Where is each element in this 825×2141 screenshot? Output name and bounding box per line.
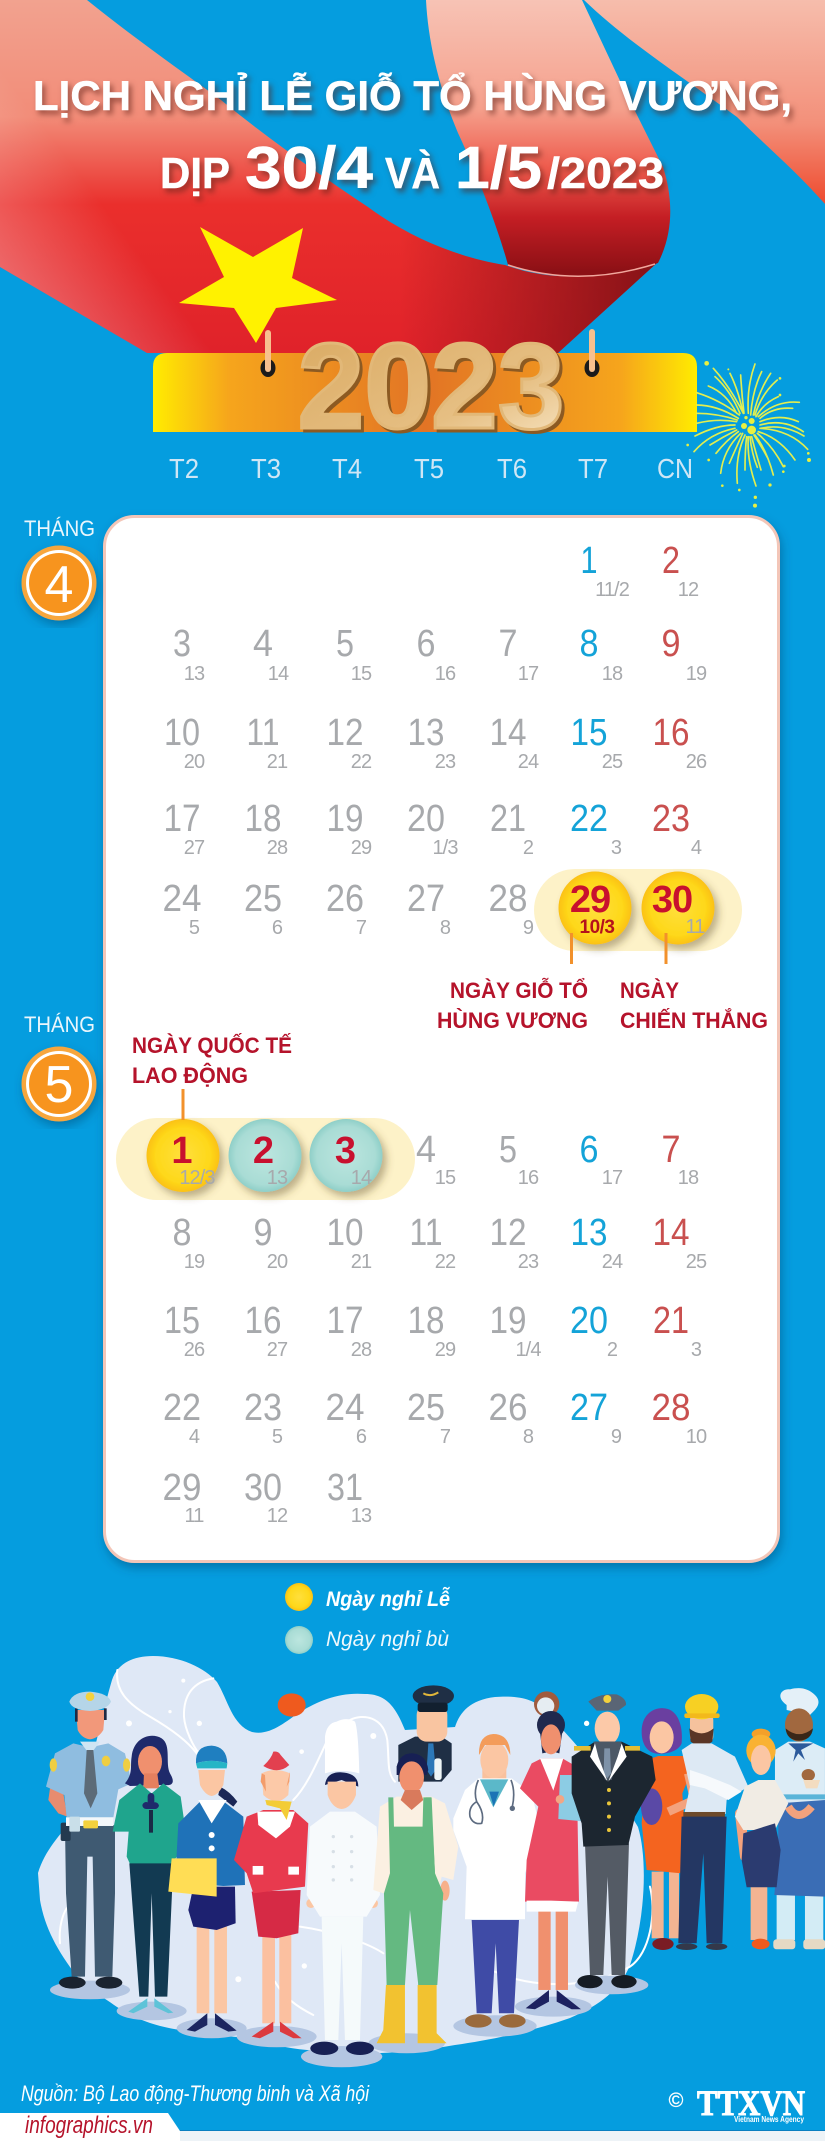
April calendar dates: 7 bbox=[356, 917, 367, 939]
April calendar dates: 11 bbox=[686, 916, 705, 938]
icon: yellow star bbox=[179, 227, 337, 343]
title bbox=[33, 70, 792, 201]
May calendar dates: 7 bbox=[662, 1129, 680, 1171]
May calendar dates: 10 bbox=[686, 1426, 707, 1448]
construction worker bbox=[676, 1694, 748, 1950]
April calendar dates: 3 bbox=[173, 623, 191, 665]
April calendar dates: 29 bbox=[570, 879, 610, 921]
title: VÀ bbox=[385, 148, 440, 198]
April calendar dates: 22 bbox=[351, 751, 372, 773]
May calendar dates: 8 bbox=[523, 1426, 534, 1448]
April calendar dates: 21 bbox=[267, 751, 288, 773]
May calendar dates: 9 bbox=[611, 1426, 622, 1448]
calendar header bar: 2023 bbox=[300, 321, 568, 457]
weekday labels: T7 bbox=[578, 453, 608, 484]
May calendar dates: 24 bbox=[602, 1251, 623, 1273]
legend bbox=[285, 1583, 450, 1654]
logo: TTXVN: TTXVN bbox=[697, 2083, 805, 2123]
weekday labels: T2 bbox=[169, 453, 199, 484]
May calendar dates: 28 bbox=[652, 1387, 690, 1429]
reporter bbox=[113, 1736, 185, 2013]
calendar header bar: 2023 bbox=[298, 318, 564, 454]
April calendar dates: 25 bbox=[602, 751, 623, 773]
chef right bbox=[773, 1688, 825, 1949]
April calendar dates: 11 bbox=[246, 712, 280, 754]
holiday label: Ngày Quốc tế Lao động bbox=[132, 1032, 292, 1088]
April calendar dates: 15 bbox=[351, 663, 372, 685]
May calendar dates: 16 bbox=[518, 1167, 539, 1189]
April calendar dates: 6 bbox=[416, 623, 436, 665]
April calendar dates: 27 bbox=[184, 837, 205, 859]
month label: April: 4 bbox=[45, 556, 73, 614]
May calendar dates: 24 bbox=[326, 1387, 364, 1429]
May calendar dates: 20 bbox=[570, 1300, 608, 1342]
April calendar dates: 15 bbox=[570, 712, 608, 754]
holiday label: Ngày Giỗ Tổ Hùng Vương: HÙNG VƯƠNG bbox=[437, 1008, 588, 1033]
shadows bbox=[453, 1976, 648, 2037]
April calendar dates: 7 bbox=[498, 623, 518, 665]
people: pilot and helmet behind bbox=[278, 1685, 559, 1782]
May calendar dates: 31 bbox=[327, 1467, 363, 1509]
May calendar dates: 27 bbox=[570, 1387, 608, 1429]
header ribbon bbox=[0, 0, 825, 353]
month label: April: THÁNG bbox=[24, 516, 95, 541]
flight attendant bbox=[234, 1751, 308, 2038]
April calendar dates: 23 bbox=[652, 798, 690, 840]
April calendar dates: 21 bbox=[490, 798, 526, 840]
people: background workers right bbox=[641, 1688, 825, 1950]
weekday labels: CN bbox=[657, 453, 693, 484]
waitress bbox=[735, 1729, 812, 1949]
month label: April bbox=[22, 516, 96, 620]
May calendar dates: 22 bbox=[163, 1387, 201, 1429]
title: 30/4 bbox=[245, 135, 373, 201]
May calendar dates: 21 bbox=[653, 1300, 689, 1342]
May calendar dates: 5 bbox=[272, 1426, 283, 1448]
floor shadows bbox=[50, 1981, 445, 2067]
April calendar dates: 14 bbox=[490, 712, 526, 754]
April calendar dates: 17 bbox=[518, 663, 539, 685]
May calendar dates: 17 bbox=[326, 1300, 364, 1342]
navy officer bbox=[572, 1694, 656, 1988]
people background blob bbox=[38, 1656, 652, 2053]
holiday label: Ngày Giỗ Tổ Hùng Vương bbox=[437, 977, 588, 1033]
April calendar dates: 20 bbox=[184, 751, 205, 773]
April calendar dates: 18 bbox=[602, 663, 623, 685]
May calendar dates: 7 bbox=[440, 1426, 451, 1448]
April calendar dates: 2 bbox=[523, 837, 534, 859]
April calendar dates: 10 bbox=[164, 712, 200, 754]
April calendar dates: 11/2 bbox=[595, 579, 630, 601]
April calendar dates: 4 bbox=[691, 837, 702, 859]
April calendar dates: 8 bbox=[440, 917, 451, 939]
April calendar dates: 19 bbox=[326, 798, 364, 840]
holiday label: Ngày Chiến Thắng: NGÀY bbox=[620, 978, 679, 1003]
May calendar dates: 23 bbox=[244, 1387, 282, 1429]
April calendar dates: 24 bbox=[518, 751, 539, 773]
police officer bbox=[46, 1692, 132, 1989]
April calendar dates: 29 bbox=[351, 837, 372, 859]
May calendar dates: 16 bbox=[244, 1300, 282, 1342]
April calendar dates: 3 bbox=[611, 837, 622, 859]
title: /2023 bbox=[547, 149, 664, 198]
April calendar dates: 30 bbox=[652, 879, 692, 921]
logo: TTXVN bbox=[669, 2083, 805, 2124]
April calendar dates: 9 bbox=[523, 917, 534, 939]
April calendar dates bbox=[162, 540, 707, 939]
May calendar dates: 28 bbox=[351, 1339, 372, 1361]
month label: May bbox=[22, 1012, 96, 1122]
May calendar dates: 9 bbox=[254, 1212, 272, 1254]
April holiday highlight bbox=[534, 869, 742, 964]
April calendar dates: 27 bbox=[407, 878, 445, 920]
chef bbox=[306, 1719, 380, 2055]
people: front workers right bbox=[418, 1694, 656, 2037]
icon: fireworks bbox=[686, 361, 811, 508]
May calendar dates: 25 bbox=[407, 1387, 445, 1429]
May calendar dates: 15 bbox=[164, 1300, 200, 1342]
weekday labels: T4 bbox=[332, 453, 362, 484]
May calendar dates: 13 bbox=[570, 1212, 608, 1254]
May calendar dates: 25 bbox=[686, 1251, 707, 1273]
April calendar dates: 16 bbox=[652, 712, 690, 754]
April calendar dates: 10/3 bbox=[580, 917, 614, 938]
title: DỊP bbox=[160, 149, 230, 198]
May calendar dates: 4 bbox=[189, 1426, 200, 1448]
farmer bbox=[373, 1753, 458, 2043]
doctor bbox=[453, 1734, 541, 2028]
logo: TTXVN: Vietnam News Agency bbox=[734, 2115, 804, 2124]
month label: May: 5 bbox=[45, 1056, 73, 1114]
legend: Ngày nghỉ bù bbox=[326, 1628, 449, 1651]
title: 1/5 bbox=[455, 135, 542, 201]
people: front workers left bbox=[46, 1692, 458, 2067]
May calendar dates: 20 bbox=[267, 1251, 288, 1273]
April calendar dates: 9 bbox=[662, 623, 680, 665]
May calendar dates: 1 bbox=[171, 1130, 192, 1172]
May calendar dates: 4 bbox=[416, 1129, 436, 1171]
weekday labels: T5 bbox=[414, 453, 444, 484]
May calendar dates: 6 bbox=[356, 1426, 367, 1448]
May calendar dates: 22 bbox=[435, 1251, 456, 1273]
May calendar dates bbox=[162, 1129, 707, 1527]
April calendar dates: 8 bbox=[580, 623, 598, 665]
April calendar dates: 20 bbox=[407, 798, 445, 840]
farmer's green leg bbox=[418, 1797, 440, 1985]
April calendar dates: 5 bbox=[189, 917, 200, 939]
May holiday highlight bbox=[116, 1089, 415, 1200]
holiday label: Ngày Quốc tế Lao động: NGÀY QUỐC TẾ bbox=[132, 1032, 292, 1058]
May calendar dates: 27 bbox=[267, 1339, 288, 1361]
April calendar dates: 16 bbox=[435, 663, 456, 685]
April calendar dates: 24 bbox=[162, 878, 202, 920]
April calendar dates: 25 bbox=[244, 878, 282, 920]
April calendar dates: 26 bbox=[686, 751, 707, 773]
May calendar dates: 2 bbox=[253, 1130, 273, 1172]
May calendar dates: 18 bbox=[678, 1167, 699, 1189]
April calendar dates: 28 bbox=[267, 837, 288, 859]
weekday labels: T6 bbox=[497, 453, 527, 484]
May calendar dates: 29 bbox=[435, 1339, 456, 1361]
April calendar dates: 19 bbox=[686, 663, 707, 685]
May calendar dates: 21 bbox=[351, 1251, 372, 1273]
April calendar dates: 26 bbox=[326, 878, 364, 920]
businesswoman bbox=[168, 1746, 245, 2032]
May calendar dates: 29 bbox=[162, 1467, 202, 1509]
footer bar: infographics.vn bbox=[25, 2112, 153, 2139]
holiday label: Ngày Chiến Thắng: CHIẾN THẮNG bbox=[620, 1008, 768, 1033]
April calendar dates: 1/3 bbox=[432, 837, 458, 859]
April calendar dates: 5 bbox=[336, 623, 354, 665]
April calendar dates: 12 bbox=[678, 579, 699, 601]
April calendar dates: 17 bbox=[164, 798, 200, 840]
April calendar dates: 22 bbox=[570, 798, 608, 840]
May calendar dates: 17 bbox=[602, 1167, 623, 1189]
holiday label: Ngày Chiến Thắng bbox=[620, 978, 768, 1033]
May calendar dates: 13 bbox=[351, 1505, 372, 1527]
May calendar dates: 15 bbox=[435, 1167, 456, 1189]
May calendar dates: 12/3 bbox=[179, 1167, 215, 1189]
May calendar dates: 2 bbox=[607, 1339, 618, 1361]
April calendar dates: 14 bbox=[268, 663, 289, 685]
May calendar dates: 14 bbox=[652, 1212, 690, 1254]
May calendar dates: 12 bbox=[490, 1212, 526, 1254]
April calendar dates: 1 bbox=[580, 540, 598, 582]
April calendar dates: 18 bbox=[244, 798, 282, 840]
weekday labels bbox=[169, 453, 693, 484]
May calendar dates: 5 bbox=[499, 1129, 517, 1171]
holiday label: Ngày Giỗ Tổ Hùng Vương: NGÀY GIỖ TỔ bbox=[450, 977, 588, 1003]
May calendar dates: 8 bbox=[172, 1212, 192, 1254]
April calendar dates: 28 bbox=[488, 878, 528, 920]
May calendar dates: 10 bbox=[326, 1212, 364, 1254]
April calendar dates: 4 bbox=[253, 623, 273, 665]
May calendar dates: 11 bbox=[410, 1212, 442, 1254]
panel: calendar card bbox=[104, 516, 778, 1562]
April calendar dates: 6 bbox=[272, 917, 283, 939]
May calendar dates: 19 bbox=[490, 1300, 526, 1342]
April calendar dates: 2 bbox=[662, 540, 680, 582]
holiday label: Ngày Quốc tế Lao động: LAO ĐỘNG bbox=[132, 1063, 248, 1088]
May calendar dates: 30 bbox=[244, 1467, 282, 1509]
April calendar dates: 13 bbox=[184, 663, 205, 685]
weekday labels: T3 bbox=[251, 453, 281, 484]
May calendar dates: 3 bbox=[335, 1130, 355, 1172]
May calendar dates: 23 bbox=[518, 1251, 539, 1273]
May calendar dates: 12 bbox=[267, 1505, 288, 1527]
woman with baby bbox=[641, 1708, 694, 1950]
April calendar dates: 23 bbox=[435, 751, 456, 773]
source: Nguồn: Bộ Lao động-Thương binh và Xã hội bbox=[21, 2081, 370, 2106]
May calendar dates: 3 bbox=[691, 1339, 702, 1361]
April calendar dates: 13 bbox=[408, 712, 444, 754]
May calendar dates: 26 bbox=[184, 1339, 205, 1361]
legend: Ngày nghỉ Lễ bbox=[326, 1588, 450, 1611]
month label: May: THÁNG bbox=[24, 1012, 95, 1037]
May calendar dates: 13 bbox=[267, 1167, 288, 1189]
May calendar dates: 18 bbox=[408, 1300, 444, 1342]
April calendar dates: 12 bbox=[326, 712, 364, 754]
May calendar dates: 19 bbox=[184, 1251, 205, 1273]
May calendar dates: 6 bbox=[580, 1129, 598, 1171]
calendar header bar bbox=[153, 318, 697, 457]
May calendar dates: 26 bbox=[488, 1387, 528, 1429]
logo: TTXVN: © bbox=[669, 2090, 684, 2112]
title: LỊCH NGHỈ LỄ GIỖ TỔ HÙNG VƯƠNG, bbox=[33, 70, 792, 119]
May calendar dates: 1/4 bbox=[515, 1339, 541, 1361]
footer bar bbox=[0, 2112, 825, 2141]
May calendar dates: 14 bbox=[351, 1167, 372, 1189]
May calendar dates: 11 bbox=[185, 1505, 204, 1527]
woman with clipboard bbox=[520, 1711, 597, 2009]
